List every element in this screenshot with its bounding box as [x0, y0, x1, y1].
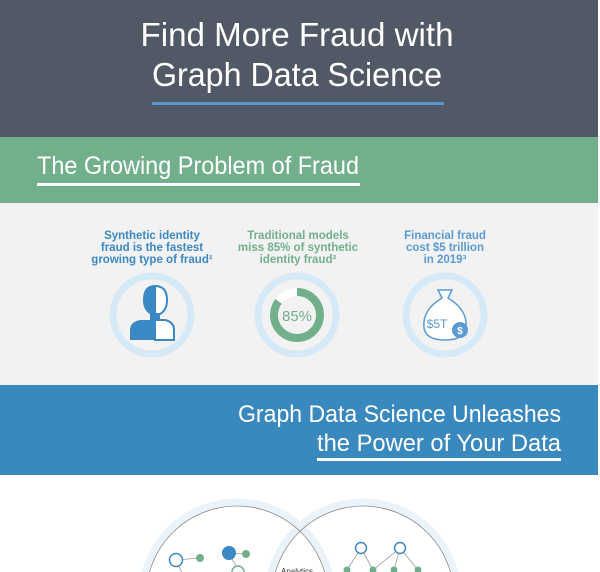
header panel	[0, 0, 598, 137]
stat 2 text: Traditional models	[247, 230, 349, 242]
stat 1 text	[91, 230, 213, 266]
stat 2 text: miss 85% of synthetic	[238, 242, 359, 254]
heading: Graph Data Science Unleashes the Power of Your Data	[238, 401, 562, 457]
title: Graph Data Science	[152, 56, 442, 93]
stat 3 text	[404, 230, 486, 266]
stat 2 text	[238, 230, 359, 266]
icon: money bag $5T	[406, 276, 484, 354]
left graph nodes	[170, 546, 250, 572]
stat 3 text: in 2019³	[424, 254, 467, 266]
heading: Graph Data Science Unleashes the Power of Your Data: Graph Data Science Unleashes	[238, 401, 561, 428]
icon: puzzle person	[113, 276, 191, 354]
heading: The Growing Problem of Fraud: The Growing Problem of Fraud	[37, 152, 359, 180]
right graph nodes	[344, 542, 422, 572]
venn diagram	[142, 502, 458, 572]
heading: Graph Data Science Unleashes the Power of Your Data: the Power of Your Data	[317, 430, 562, 457]
chart: 85% donut	[258, 276, 336, 354]
icon: money bag $5T: $5T	[427, 317, 448, 331]
stat 3 text: cost $5 trillion	[406, 242, 484, 254]
stat 3 text: Financial fraud	[404, 230, 486, 242]
title	[140, 16, 454, 93]
stat 2 text: identity fraud²	[260, 254, 336, 266]
icon: money bag $5T: $	[457, 326, 463, 337]
panel: fraud stats	[0, 203, 598, 385]
stat 1 text: growing type of fraud¹	[91, 254, 213, 266]
stat 1 text: Synthetic identity	[104, 230, 201, 242]
title: Find More Fraud with	[140, 16, 454, 53]
stat 1 text: fraud is the fastest	[101, 242, 203, 254]
chart: 85% donut: 85%	[282, 308, 312, 325]
panel: graph data science heading band	[0, 385, 598, 475]
panel: growing problem heading band	[0, 137, 598, 203]
